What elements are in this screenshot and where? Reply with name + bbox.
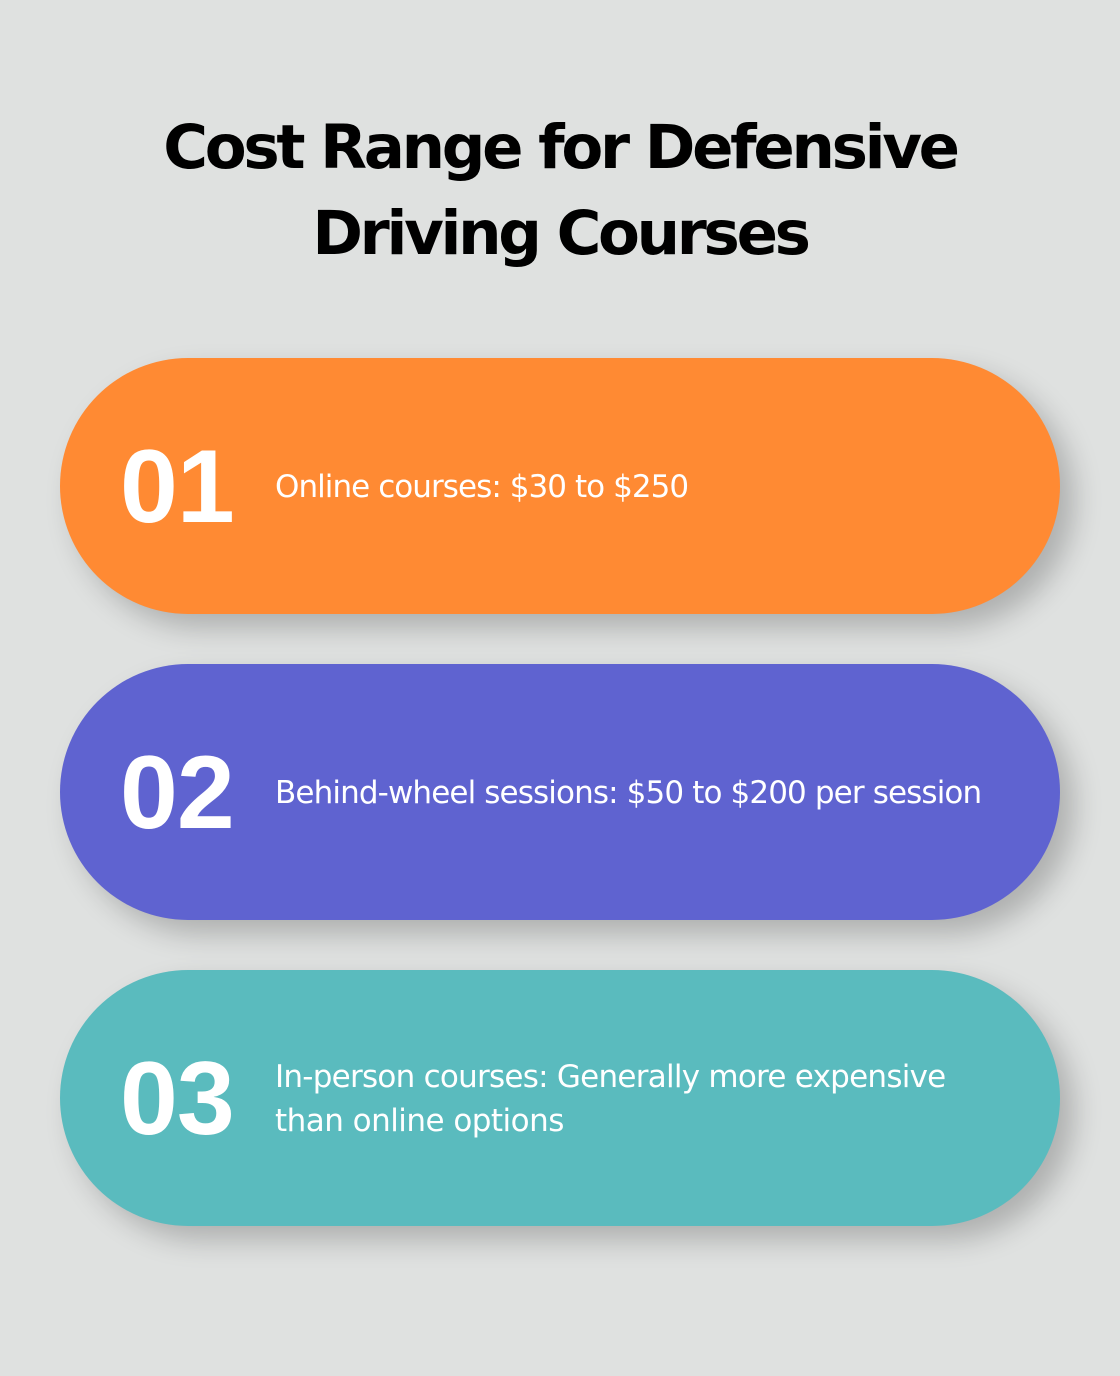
panel: online courses bbox=[60, 358, 1060, 614]
number 01: 01 bbox=[120, 429, 234, 545]
text: behind-wheel sessions: Behind-wheel sessions: $50 to $200 per session bbox=[275, 775, 981, 811]
panel: in-person courses bbox=[60, 970, 1060, 1226]
title: Driving Courses bbox=[312, 198, 808, 269]
number 02: 02 bbox=[120, 735, 234, 851]
number 03: 03 bbox=[120, 1041, 234, 1157]
text: in-person courses: than online options bbox=[275, 1103, 564, 1139]
panel: behind-wheel sessions bbox=[60, 664, 1060, 920]
text: in-person courses bbox=[275, 1059, 946, 1139]
text: in-person courses: In-person courses: Generally more expensive bbox=[275, 1059, 946, 1095]
title bbox=[163, 112, 958, 269]
title: Cost Range for Defensive bbox=[163, 112, 957, 183]
text: online courses: Online courses: $30 to $250 bbox=[275, 469, 688, 505]
